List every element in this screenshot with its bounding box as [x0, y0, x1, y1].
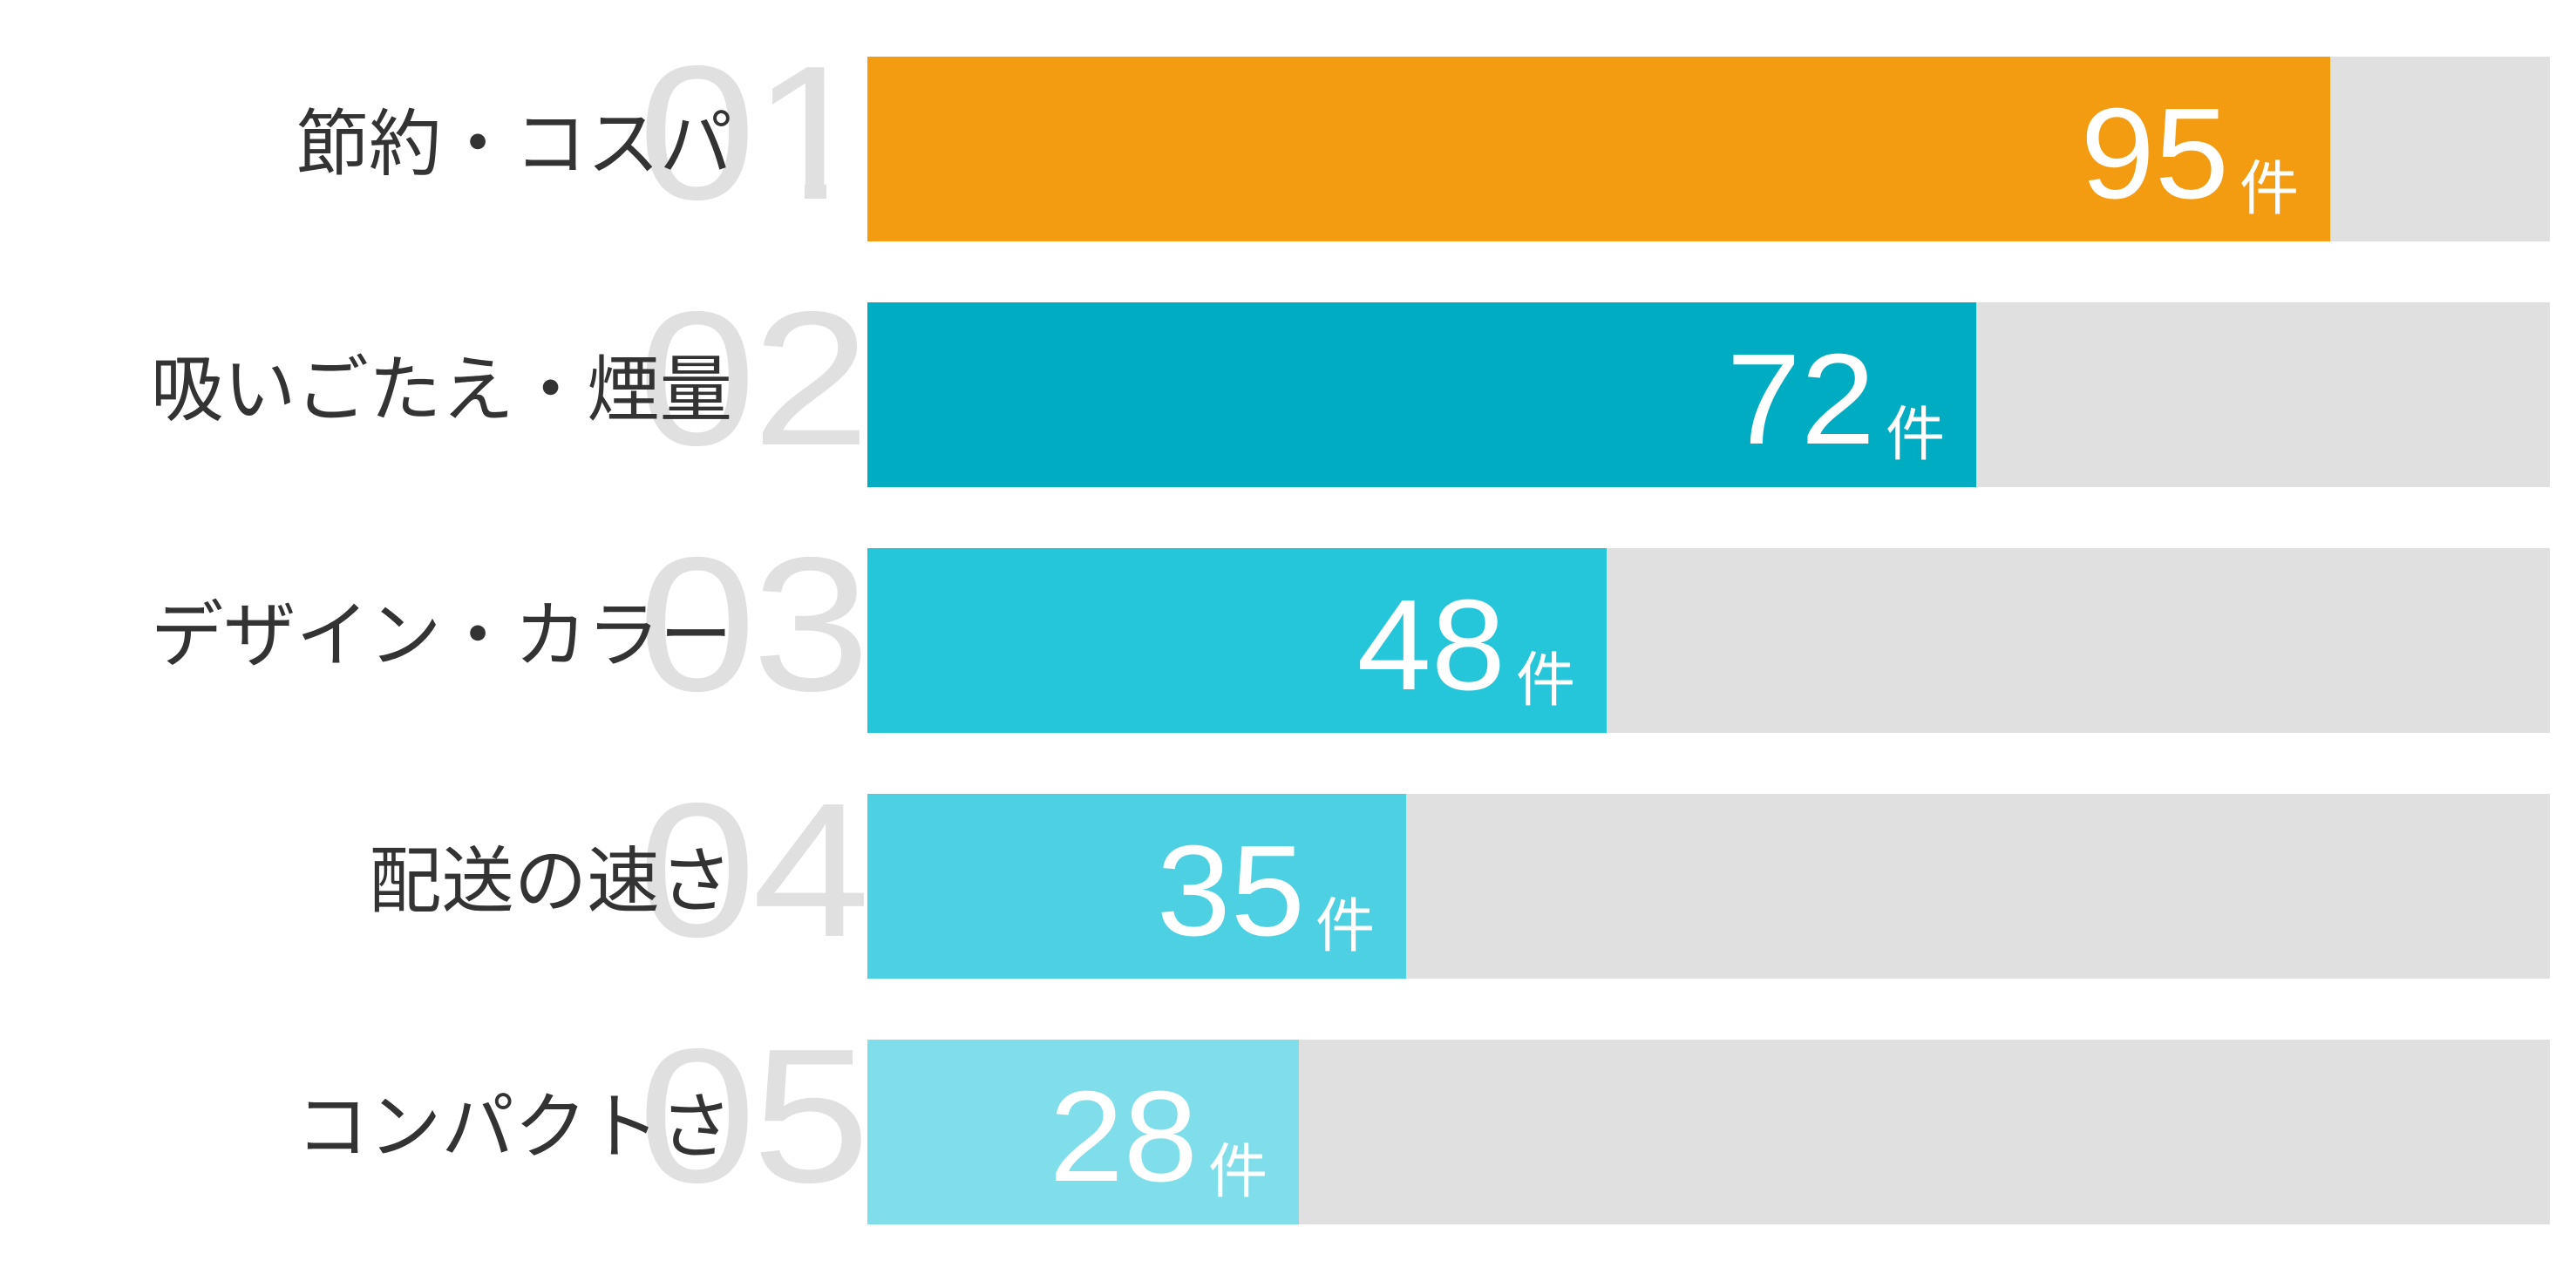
- bar value 48: [867, 548, 1607, 733]
- category label 5: コンパクトさ: [296, 1087, 732, 1168]
- unit 4: 件: [1315, 893, 1375, 959]
- bar value 28: [867, 1040, 1299, 1224]
- bar track 2: [867, 302, 2550, 487]
- category label 3: デザイン・カラー: [151, 595, 732, 676]
- bar value 72: [867, 302, 1976, 487]
- rank number 05: 05: [638, 1009, 867, 1223]
- bar value 35: [867, 794, 1406, 979]
- bar track 1: [867, 57, 2550, 241]
- rank number 02: 02: [638, 272, 867, 485]
- row 1: 節約・コスパ: [296, 26, 2550, 241]
- row 5: コンパクトさ: [296, 1009, 2550, 1224]
- row 4: 配送の速さ: [369, 763, 2550, 979]
- bar value 95: [867, 57, 2330, 241]
- value 35: 35: [1157, 818, 1305, 962]
- rank number 04: 04: [638, 763, 867, 977]
- row 3: デザイン・カラー: [151, 518, 2550, 733]
- category label 2: 吸いごたえ・煙量: [151, 349, 732, 430]
- bar track 3: [867, 548, 2550, 733]
- unit 2: 件: [1886, 402, 1945, 468]
- category label 1: 節約・コスパ: [296, 104, 732, 185]
- unit 5: 件: [1208, 1139, 1268, 1205]
- rank number 03: 03: [638, 518, 867, 731]
- value 48: 48: [1357, 573, 1505, 716]
- row 2: 吸いごたえ・煙量: [151, 272, 2550, 487]
- rank number 01: 01: [638, 26, 867, 240]
- unit 1: 件: [2240, 156, 2299, 222]
- bar track 4: [867, 794, 2550, 979]
- unit 3: 件: [1516, 647, 1575, 714]
- bar track 5: [867, 1040, 2550, 1224]
- value 72: 72: [1727, 327, 1875, 471]
- value 95: 95: [2081, 81, 2229, 225]
- category label 4: 配送の速さ: [369, 841, 732, 922]
- value 28: 28: [1050, 1064, 1198, 1208]
